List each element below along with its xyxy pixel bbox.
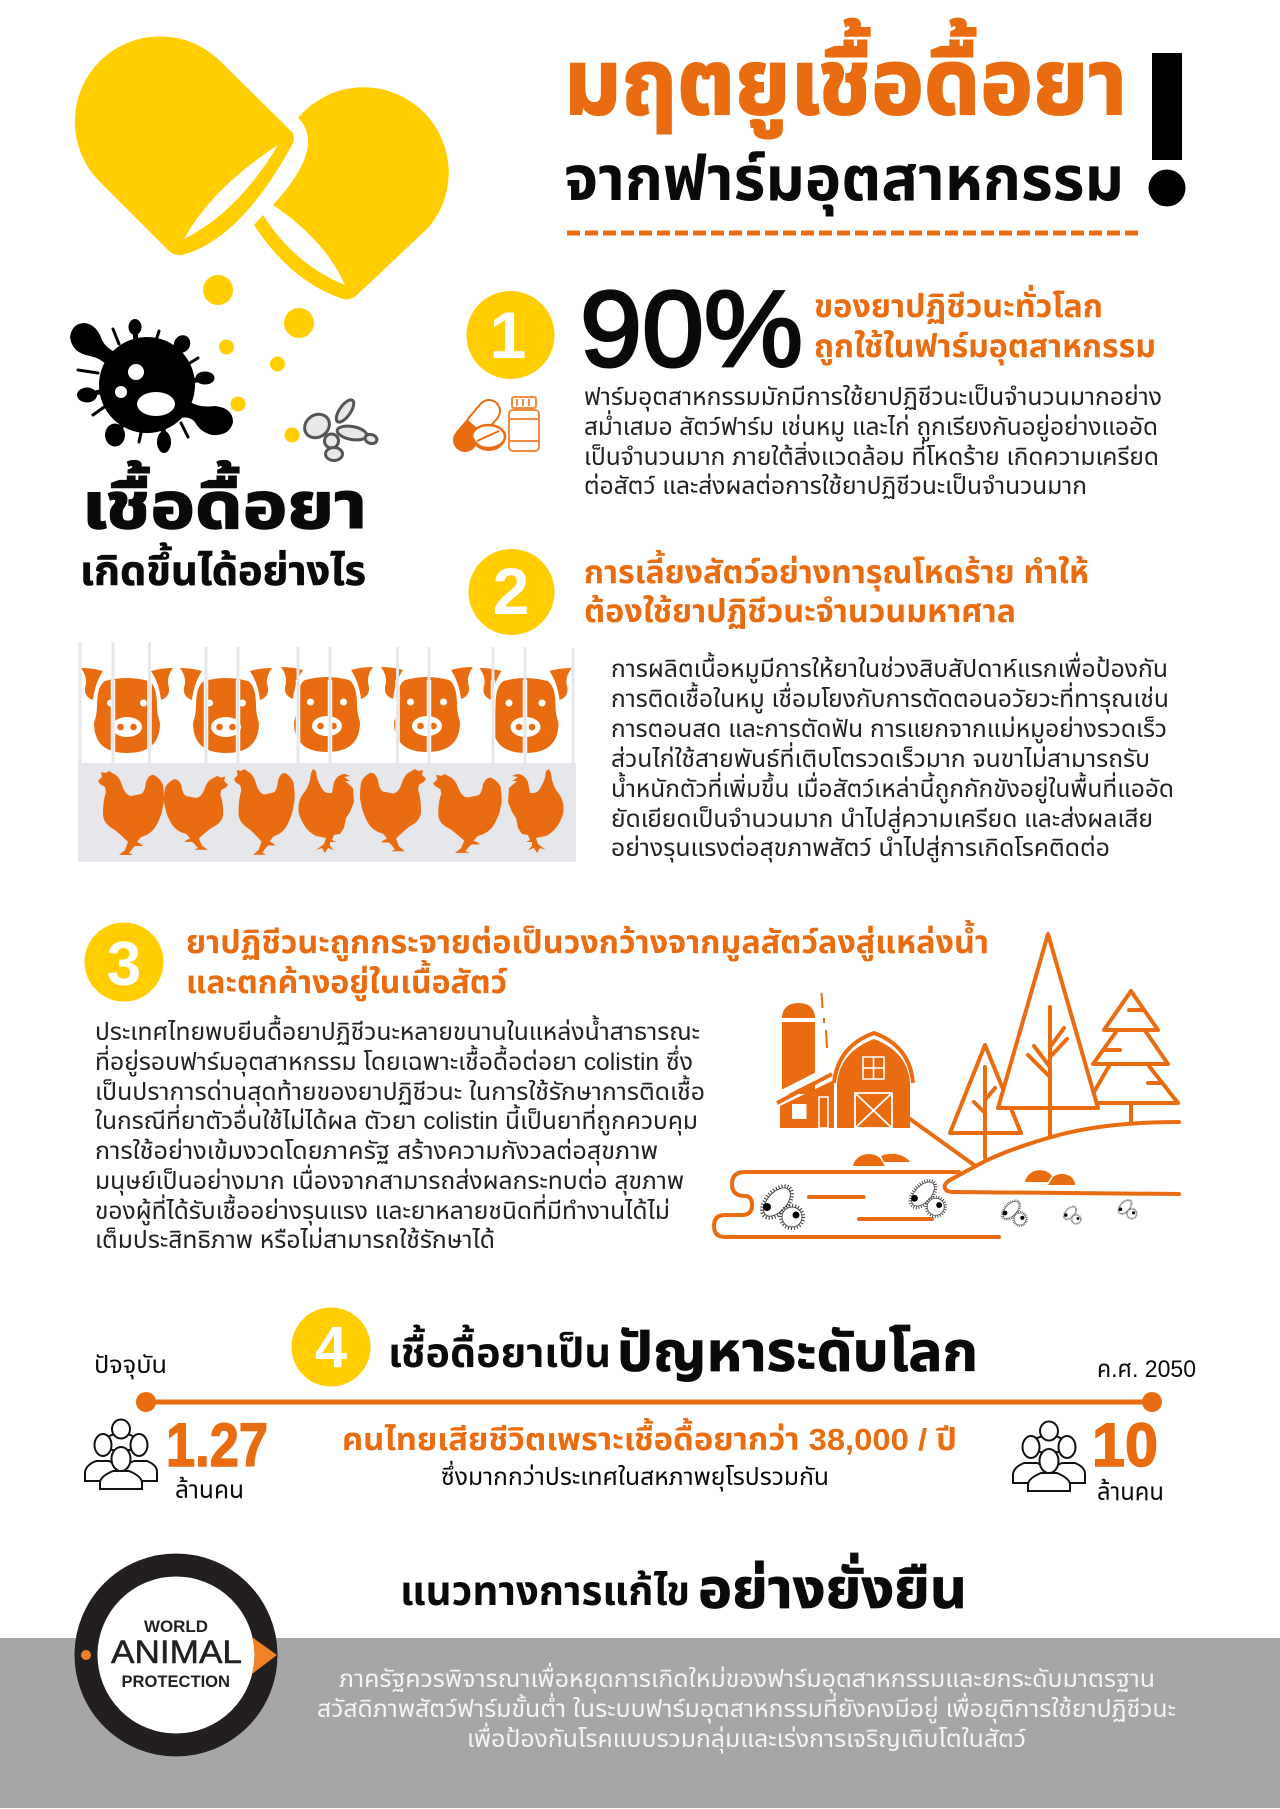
text: section 2 body: การติดเชื้อในหมู เชื่อมโยงกับการตัดตอนอวัยวะที่ทารุณเช่น [611,682,1169,714]
stat: 90 percent: 90% [580,268,803,389]
badge 1 [466,291,554,379]
heading: section 4: เชื้อดื้อยาเป็น [388,1324,611,1376]
stat: 2050 10 million [1013,1411,1164,1506]
stat: 2050 10 million: 10 [1092,1411,1158,1479]
badge 3 [84,922,164,1002]
text: section 2 body: การผลิตเนื้อหมูมีการให้ยาในช่วงสิบสัปดาห์แรกเพื่อป้องกัน [611,652,1168,684]
text: section 1 body: ต่อสัตว์ และส่งผลต่อการใช้ยาปฏิชีวนะเป็นจำนวนมาก [584,472,1087,500]
timeline [94,1352,1196,1412]
text: section 2 body: อย่างรุนแรงต่อสุขภาพสัตว์ นำไปสู่การเกิดโรคติดต่อ [611,834,1110,863]
text: section 3 body: เต็มประสิทธิภาพ หรือไม่สามารถใช้รักษาได้ [95,1226,495,1254]
text: section 1 body [584,383,1162,500]
text: section 3 body: เป็นปราการด่านสุดท้ายของยาปฏิชีวนะ ในการใช้รักษาการติดเชื้อ [95,1075,705,1107]
timeline: ปัจจุบัน [94,1352,167,1380]
badge 2 [468,549,554,635]
text: section 1 body: เป็นจำนวนมาก ภายใต้สิ่งแวดล้อม ที่โหดร้าย เกิดความเครียด [584,440,1159,471]
timeline: ค.ศ. 2050 [1097,1356,1196,1383]
barn [775,1033,913,1128]
text: solution body: เพื่อป้องกันโรคแบบรวมกลุ่มและเร่งการเจริญเติบโตในสัตว์ [467,1722,1026,1754]
text: section 3 body: การใช้อย่างเข้มงวดโดยภาครัฐ สร้างความกังวลต่อสุขภาพ [95,1137,658,1166]
text: section 2 body: การตอนสด และการตัดฟัน การแยกจากแม่หมูอย่างรวดเร็ว [611,715,1167,744]
stat: today 1.27 million: 1.27 [166,1411,268,1479]
text: section 2 body: ยัดเยียดเป็นจำนวนมาก นำไปสู่ความเครียด และส่งผลเสีย [611,805,1153,834]
logo: World Animal Protection: ANIMAL [111,1634,242,1670]
logo: World Animal Protection: WORLD [144,1617,208,1636]
text: section 3 body [95,1015,705,1254]
icon: pills and bottle [453,397,539,452]
badge 1: 1 [490,298,526,372]
heading: section 4 [388,1321,978,1383]
heading: section 1: ถูกใช้ในฟาร์มอุตสาหกรรม [814,328,1156,365]
exclamation mark [1148,53,1186,206]
text: section 2 body: ส่วนไก่ใช้สายพันธ์ที่เติบโตรวดเร็วมาก จนขาไม่สามารถรับ [611,742,1150,773]
heading: section 2: การเลี้ยงสัตว์อย่างทารุณโหดร้าย ทำให้ [584,549,1089,591]
silo [782,993,827,1094]
heading: sustainable solution: แนวทางการแก้ไข [400,1568,690,1614]
logo: World Animal Protection [81,1565,277,1745]
text: section 3 body: มนุษย์เป็นอย่างมาก เนื่องจากสามารถส่งผลกระทบต่อ สุขภาพ [95,1164,684,1196]
heading: resistant bacteria: เกิดขึ้นได้อย่างไร [80,542,366,594]
badge 4: 4 [315,1315,347,1380]
falling drug particles [203,275,314,442]
text: solution body: ภาครัฐควรพิจารณาเพื่อหยุดการเกิดใหม่ของฟาร์มอุตสาหกรรมและยกระดับมาตรฐาน [339,1662,1155,1694]
trees [950,934,1178,1158]
badge 3: 3 [107,930,141,999]
heading: resistant bacteria [80,460,367,594]
callout: Thai deaths [342,1417,957,1492]
title [564,18,1127,216]
text: solution body: สวัสดิภาพสัตว์ฟาร์มขั้นต่ำ ในระบบฟาร์มอุตสาหกรรมที่ยังคงมีอยู่ เพื่อยุติการใช้ยาปฏิชีวนะ [317,1692,1176,1724]
heading: section 1 [814,284,1156,365]
germs in water [756,1176,1137,1228]
text: section 3 body: ของผู้ที่ได้รับเชื้ออย่างรุนแรง และยาหลายชนิดที่มีทำงานได้ไม่ [95,1194,670,1226]
callout: Thai deaths: คนไทยเสียชีวิตเพราะเชื้อดื้อยากว่า 38,000 / ปี [342,1417,957,1457]
heading: section 1: ของยาปฏิชีวนะทั่วโลก [814,284,1103,324]
text: section 2 body [611,652,1174,863]
heading: section 3: ยาปฏิชีวนะถูกกระจายต่อเป็นวงกว้างจากมูลสัตว์ลงสู่แหล่งน้ำ [186,919,989,961]
callout: Thai deaths: ซึ่งมากกว่าประเทศในสหภาพยุโรปรวมกัน [441,1460,829,1492]
bushes [853,1154,1075,1185]
heading: section 4: ปัญหาระดับโลก [617,1321,978,1383]
heading: sustainable solution [400,1552,967,1620]
title: มฤตยูเชื้อดื้อยา [564,18,1127,139]
badge 2: 2 [493,554,529,628]
heading: section 2: ต้องใช้ยาปฏิชีวนะจำนวนมหาศาล [584,593,1016,629]
illustration: farm, trees and river [714,934,1179,1237]
text: section 3 body: ประเทศไทยพบยีนดื้อยาปฏิชีวนะหลายขนานในแหล่งน้ำสาธารณะ [95,1015,700,1046]
text: section 1 body: สม่ำเสมอ สัตว์ฟาร์ม เช่นหมู และไก่ ถูกเรียงกันอยู่อย่างแออัด [584,410,1158,442]
stat: today 1.27 million [85,1411,268,1504]
ground and river [714,1119,1179,1237]
heading: sustainable solution: อย่างยั่งยืน [698,1552,967,1620]
icon: broken capsule [75,36,449,299]
stat: today 1.27 million: ล้านคน [175,1476,244,1504]
text: section 3 body: ในกรณีที่ยาตัวอื่นใช้ไม่ได้ผล ตัวยา colistin นี้เป็นยาที่ถูกควบคุม [95,1104,698,1136]
icon: black germ [70,319,233,453]
text: section 2 body: น้ำหนักตัวที่เพิ่มขึ้น เมื่อสัตว์เหล่านี้ถูกกักขังอยู่ในพื้นที่แออัด [611,772,1174,804]
text: solution body [317,1662,1176,1754]
stat: 2050 10 million: ล้านคน [1097,1478,1164,1506]
text: section 1 body: ฟาร์มอุตสาหกรรมมักมีการใช้ยาปฏิชีวนะเป็นจำนวนมากอย่าง [584,383,1162,412]
illustration: caged pigs and chickens [78,642,576,862]
logo: World Animal Protection: PROTECTION [122,1672,230,1691]
panel: grey solution band [0,1638,1280,1808]
text: section 3 body: ที่อยู่รอบฟาร์มอุตสาหกรรม โดยเฉพาะเชื้อดื้อต่อยา colistin ซึ่ง [95,1045,693,1077]
pigs row [81,667,572,753]
heading: section 3: และตกค้างอยู่ในเนื้อสัตว์ [186,959,508,1001]
heading: section 3 [186,919,989,1001]
heading: section 2 [584,549,1089,629]
badge 4 [292,1308,370,1386]
icon: grey bacteria [300,397,378,460]
heading: resistant bacteria: เชื้อดื้อยา [82,460,367,542]
title: จากฟาร์มอุตสาหกรรม [564,145,1124,216]
chickens row [98,769,564,855]
